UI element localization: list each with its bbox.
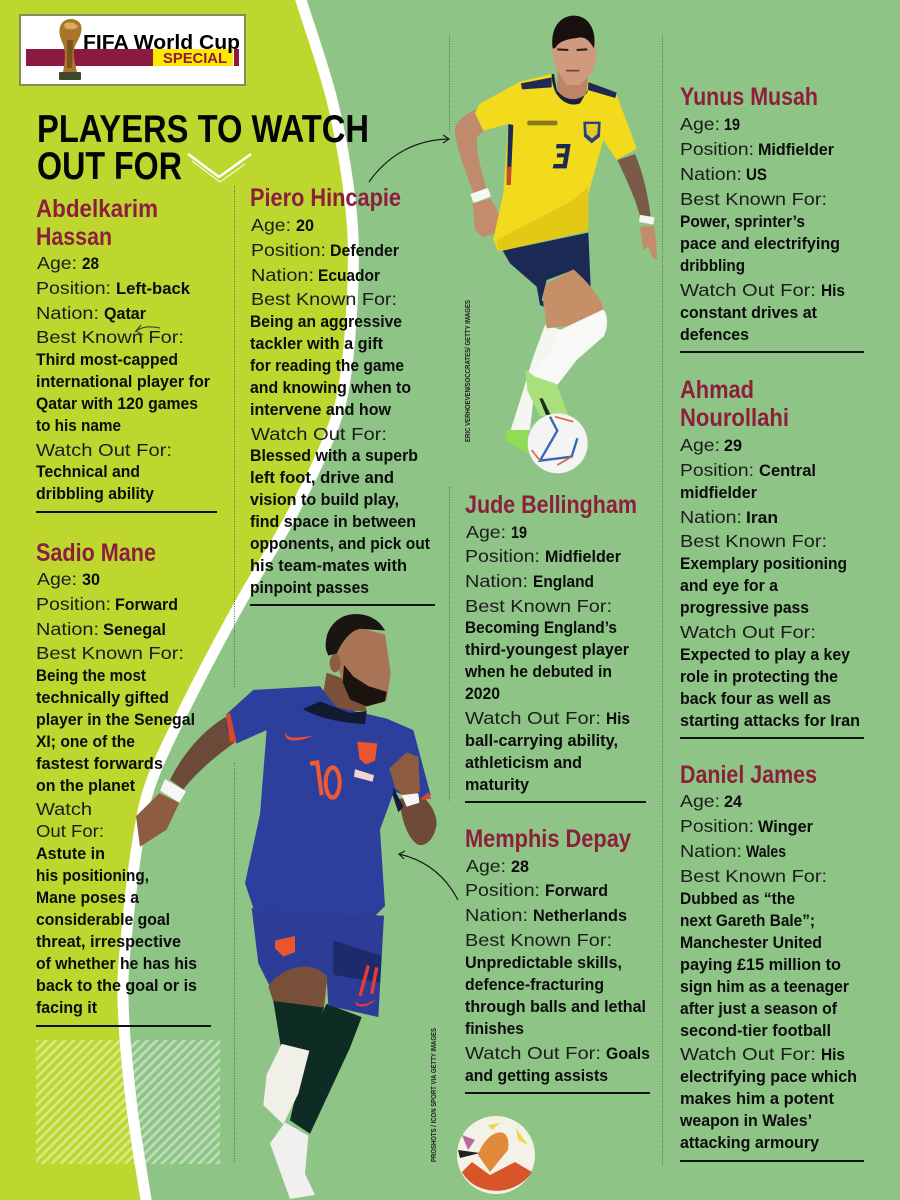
back boot <box>505 430 529 454</box>
panel: Daniel James: Manchester United <box>680 933 822 952</box>
front boot <box>263 1044 309 1124</box>
panel: Jude Bellingham: His <box>606 709 630 728</box>
panel: Ahmad Nourollahi <box>680 376 864 738</box>
panel: Sadio Mane: Mane poses a <box>36 888 139 907</box>
panel: Memphis Depay <box>465 825 650 1093</box>
panel: Piero Hincapie: Being an aggressive <box>250 312 402 331</box>
panel: Memphis Depay: Age: <box>466 856 506 876</box>
panel: Jude Bellingham: 19 <box>511 523 527 542</box>
name: Yunus Musah <box>680 83 818 111</box>
panel: Abdelkarim Hassan: Qatar <box>104 304 146 323</box>
arrow: to Hincapie photo <box>369 135 449 182</box>
panel: Daniel James: Age: <box>680 791 720 811</box>
face <box>333 627 391 706</box>
panel: Yunus Musah: His <box>821 281 845 300</box>
hair <box>552 16 595 48</box>
icon: world cup trophy <box>59 19 81 80</box>
left arm <box>170 717 235 789</box>
panel: Yunus Musah: defences <box>680 325 749 344</box>
panel: Daniel James: second-tier football <box>680 1021 831 1040</box>
shorts <box>503 233 591 312</box>
name: Ahmad <box>680 376 754 404</box>
name <box>36 195 158 251</box>
panel: Ahmad Nourollahi: Iran <box>746 508 778 527</box>
name: Hassan <box>36 223 112 251</box>
panel: Ahmad Nourollahi: Expected to play a key <box>680 645 850 664</box>
panel: Piero Hincapie: Nation: <box>251 265 314 285</box>
panel: Abdelkarim Hassan: Left-back <box>116 279 191 298</box>
panel: Piero Hincapie: Defender <box>330 241 399 260</box>
panel: Sadio Mane: Nation: <box>36 619 99 639</box>
panel: Piero Hincapie: 20 <box>296 216 314 235</box>
panel: Ahmad Nourollahi: Age: <box>680 435 720 455</box>
shorts <box>252 908 384 1017</box>
panel: Piero Hincapie: Position: <box>251 240 326 260</box>
right fist <box>389 752 420 799</box>
name: Memphis Depay <box>465 825 631 853</box>
panel: Piero Hincapie: for reading the game <box>250 356 404 375</box>
right arm <box>399 795 437 845</box>
name: Jude Bellingham <box>465 491 637 519</box>
panel: Daniel James: paying £15 million to <box>680 955 841 974</box>
panel: Memphis Depay: Position: <box>465 880 540 900</box>
title: OUT FOR <box>37 145 182 188</box>
panel: Daniel James: Winger <box>758 817 813 836</box>
panel: Sadio Mane: Being the most <box>36 666 146 685</box>
panel: Sadio Mane: threat, irrespective <box>36 932 181 951</box>
sponsor mark <box>527 121 557 125</box>
panel: Sadio Mane: Forward <box>115 595 178 614</box>
panel: Sadio Mane: Best Known For: <box>36 643 184 663</box>
panel: Memphis Depay: finishes <box>465 1019 524 1038</box>
panel: Piero Hincapie: opponents, and pick out <box>250 534 430 553</box>
left arm <box>455 109 487 193</box>
panel: Daniel James: Nation: <box>680 841 742 861</box>
panel: Daniel James <box>679 761 864 1161</box>
panel: Sadio Mane: back to the goal or is <box>36 976 197 995</box>
panel: Jude Bellingham: Nation: <box>465 571 528 591</box>
panel: Sadio Mane: fastest forwards <box>36 754 163 773</box>
panel: Piero Hincapie: Blessed with a superb <box>250 446 418 465</box>
panel: Memphis Depay: Netherlands <box>533 906 627 925</box>
panel: Yunus Musah: Nation: <box>680 164 742 184</box>
panel: Memphis Depay: Forward <box>545 881 608 900</box>
panel: Abdelkarim Hassan: dribbling ability <box>36 484 155 503</box>
wristband <box>160 779 186 803</box>
panel: Abdelkarim Hassan: Best Known For: <box>36 327 184 347</box>
panel: Jude Bellingham: third-youngest player <box>465 640 629 659</box>
crest <box>357 742 377 765</box>
panel: Sadio Mane: his positioning, <box>36 866 149 885</box>
panel: Sadio Mane: Age: <box>37 569 77 589</box>
name: Nourollahi <box>680 404 789 432</box>
panel: Abdelkarim Hassan: Qatar with 120 games <box>36 394 198 413</box>
player photo: Piero Hincapie <box>455 16 657 473</box>
left hand <box>473 198 504 237</box>
panel: Abdelkarim Hassan: international player for <box>36 372 210 391</box>
panel: Daniel James: Position: <box>680 816 754 836</box>
back leg <box>290 1004 362 1134</box>
panel: Abdelkarim Hassan: to his name <box>36 416 121 435</box>
panel: Daniel James: Best Known For: <box>680 866 827 886</box>
panel: Jude Bellingham: Position: <box>465 546 540 566</box>
title <box>37 108 369 188</box>
panel: Ahmad Nourollahi: Best Known For: <box>680 531 827 551</box>
panel: Abdelkarim Hassan: Position: <box>36 278 111 298</box>
shirt <box>475 74 637 252</box>
panel: Sadio Mane: Senegal <box>103 620 166 639</box>
ball <box>528 413 588 473</box>
panel: Daniel James: after just a season of <box>680 999 837 1018</box>
panel: Yunus Musah: Power, sprinter’s <box>680 212 805 231</box>
panel: Abdelkarim Hassan: Nation: <box>36 303 99 323</box>
face <box>552 35 597 85</box>
panel: Ahmad Nourollahi: Exemplary positioning <box>680 554 847 573</box>
panel: Yunus Musah: 19 <box>724 115 740 134</box>
short number <box>360 965 377 996</box>
panel: Yunus Musah: Midfielder <box>758 140 834 159</box>
panel: Daniel James: next Gareth Bale”; <box>680 911 815 930</box>
panel: Jude Bellingham: Best Known For: <box>465 596 612 616</box>
flag <box>354 769 374 782</box>
panel: Piero Hincapie: vision to build play, <box>250 490 399 509</box>
panel: Ahmad Nourollahi: and eye for a <box>680 576 779 595</box>
panel: Sadio Mane <box>36 539 211 1026</box>
lower foot <box>270 1122 315 1199</box>
photo credit: Hincapie: ERIC VERHOEVEN/SOCCRATES/ GETTY IMAGES <box>463 300 472 442</box>
arrow: to Depay photo <box>399 851 458 900</box>
panel: Jude Bellingham: Watch Out For: <box>465 708 601 728</box>
panel: Sadio Mane: facing it <box>36 998 97 1017</box>
photo credit: Depay: PROSHOTS / ICON SPORT VIA GETTY IMAGES <box>429 1028 438 1162</box>
panel: Daniel James: weapon in Wales’ <box>679 1111 812 1130</box>
title: PLAYERS TO WATCH <box>37 108 369 151</box>
panel: Ahmad Nourollahi: Watch Out For: <box>680 622 816 642</box>
panel: Jude Bellingham: 2020 <box>465 684 500 703</box>
panel: Ahmad Nourollahi: Central <box>759 461 816 480</box>
panel: Abdelkarim Hassan: Technical and <box>36 462 140 481</box>
neck <box>557 60 588 103</box>
panel: Sadio Mane: XI; one of the <box>36 732 135 751</box>
panel: Yunus Musah: pace and electrifying <box>680 234 840 253</box>
thigh <box>543 269 604 328</box>
panel: Piero Hincapie <box>250 184 435 605</box>
panel: Yunus Musah <box>680 83 864 352</box>
panel: Ahmad Nourollahi: Position: <box>680 460 754 480</box>
panel: Piero Hincapie: his team-mates with <box>250 556 407 575</box>
panel: Daniel James: sign him as a teenager <box>680 977 849 996</box>
panel: Sadio Mane: Position: <box>36 594 111 614</box>
panel: Abdelkarim Hassan: Third most-capped <box>36 350 178 369</box>
panel: Piero Hincapie: Best Known For: <box>251 289 397 309</box>
logo: FIFA World Cup Special: FIFA World Cup <box>83 32 240 54</box>
thigh <box>268 967 327 1008</box>
panel: Ahmad Nourollahi: role in protecting the <box>680 667 838 686</box>
panel: Abdelkarim Hassan: Age: <box>37 253 77 273</box>
panel: Abdelkarim Hassan: 28 <box>82 254 99 273</box>
short crest <box>275 936 295 957</box>
panel: Daniel James: His <box>821 1045 845 1064</box>
panel: Daniel James: makes him a potent <box>680 1089 834 1108</box>
panel: Piero Hincapie: tackler with a gift <box>250 334 383 353</box>
panel: Daniel James: Watch Out For: <box>680 1044 816 1064</box>
panel: Sadio Mane: Out For: <box>36 821 104 841</box>
panel: Sadio Mane: 30 <box>82 570 100 589</box>
front sock <box>533 309 607 385</box>
panel: Jude Bellingham: Midfielder <box>545 547 621 566</box>
beard <box>343 665 387 706</box>
name: Daniel James <box>680 761 817 789</box>
panel: Yunus Musah: dribbling <box>680 256 745 275</box>
panel: Jude Bellingham: Becoming England’s <box>465 618 617 637</box>
panel: Piero Hincapie: Age: <box>251 215 291 235</box>
front boot <box>525 369 568 416</box>
name <box>680 376 789 432</box>
name: Sadio Mane <box>36 539 156 567</box>
shirt <box>227 686 431 918</box>
panel: Ahmad Nourollahi: 29 <box>724 436 742 455</box>
logo: FIFA World Cup Special <box>20 15 245 85</box>
name: Piero Hincapie <box>250 184 401 212</box>
panel: Yunus Musah: Age: <box>680 114 720 134</box>
panel: Piero Hincapie: left foot, drive and <box>250 468 394 487</box>
swoosh <box>285 732 313 740</box>
panel: Sadio Mane: technically gifted <box>36 688 169 707</box>
panel: Ahmad Nourollahi: starting attacks for Iran <box>680 711 860 730</box>
panel: Sadio Mane: Watch <box>36 799 92 819</box>
panel: Piero Hincapie: and knowing when to <box>250 378 411 397</box>
panel: Yunus Musah: Position: <box>680 139 754 159</box>
panel: Memphis Depay: Watch Out For: <box>465 1043 601 1063</box>
player photo: Memphis Depay <box>136 614 437 1199</box>
hair <box>326 614 385 655</box>
panel: Memphis Depay: defence-fracturing <box>465 975 604 994</box>
right arm <box>617 154 651 218</box>
panel: Jude Bellingham: athleticism and <box>465 753 582 772</box>
panel: Daniel James: electrifying pace which <box>680 1067 857 1086</box>
ball icon <box>457 1116 535 1194</box>
panel: Abdelkarim Hassan <box>36 195 217 512</box>
panel: Ahmad Nourollahi: midfielder <box>680 483 757 502</box>
panel: Piero Hincapie: Watch Out For: <box>251 424 387 444</box>
panel: Yunus Musah: US <box>746 165 767 184</box>
back sock <box>511 325 562 430</box>
panel: Daniel James: attacking armoury <box>680 1133 820 1152</box>
panel: Daniel James: Dubbed as “the <box>680 889 795 908</box>
panel: Memphis Depay: and getting assists <box>465 1066 608 1085</box>
panel: Sadio Mane: of whether he has his <box>36 954 197 973</box>
panel: Piero Hincapie: Ecuador <box>318 266 380 285</box>
panel: Ahmad Nourollahi: progressive pass <box>680 598 809 617</box>
panel: Sadio Mane: player in the Senegal <box>36 710 195 729</box>
panel: Piero Hincapie: find space in between <box>250 512 416 531</box>
panel: Memphis Depay: through balls and lethal <box>465 997 646 1016</box>
panel: Ahmad Nourollahi: Nation: <box>680 507 742 527</box>
panel: Jude Bellingham: when he debuted in <box>464 662 612 681</box>
logo: FIFA World Cup Special: SPECIAL <box>163 50 227 67</box>
panel: Yunus Musah: Best Known For: <box>680 189 827 209</box>
panel: Ahmad Nourollahi: back four as well as <box>680 689 831 708</box>
icon: chevron <box>188 154 251 182</box>
shirt number 10 <box>310 763 340 797</box>
panel: Jude Bellingham <box>464 491 646 802</box>
panel: Sadio Mane: Astute in <box>36 844 105 863</box>
panel: Daniel James: 24 <box>724 792 743 811</box>
panel: Jude Bellingham: Age: <box>466 522 506 542</box>
lime curved panel <box>0 0 353 1200</box>
white curve <box>123 0 353 1200</box>
panel: Piero Hincapie: intervene and how <box>250 400 392 419</box>
panel: Memphis Depay: Unpredictable skills, <box>465 953 622 972</box>
panel: Abdelkarim Hassan: Watch Out For: <box>36 440 172 460</box>
panel: Sadio Mane: on the planet <box>36 776 135 795</box>
panel: Jude Bellingham: England <box>533 572 594 591</box>
small stray arrow mark <box>135 325 160 335</box>
panel: Memphis Depay: Best Known For: <box>465 930 612 950</box>
panel: Sadio Mane: considerable goal <box>36 910 170 929</box>
hatched decorative box <box>36 1040 220 1164</box>
panel: Yunus Musah: constant drives at <box>680 303 817 322</box>
panel: Piero Hincapie: pinpoint passes <box>250 578 369 597</box>
neck <box>320 673 367 711</box>
ear <box>330 654 340 672</box>
left hand <box>136 793 179 847</box>
panel: Memphis Depay: 28 <box>511 857 529 876</box>
knee sleeve <box>273 1001 324 1059</box>
panel: Daniel James: Wales <box>746 842 786 861</box>
shirt number 3 <box>553 144 571 168</box>
panel: Memphis Depay: Goals <box>606 1044 650 1063</box>
crest <box>583 122 601 143</box>
name: Abdelkarim <box>36 195 158 223</box>
panel: Jude Bellingham: ball-carrying ability, <box>465 731 618 750</box>
panel: Yunus Musah: Watch Out For: <box>680 280 816 300</box>
panel: Memphis Depay: Nation: <box>465 905 528 925</box>
panel: Jude Bellingham: maturity <box>465 775 530 794</box>
